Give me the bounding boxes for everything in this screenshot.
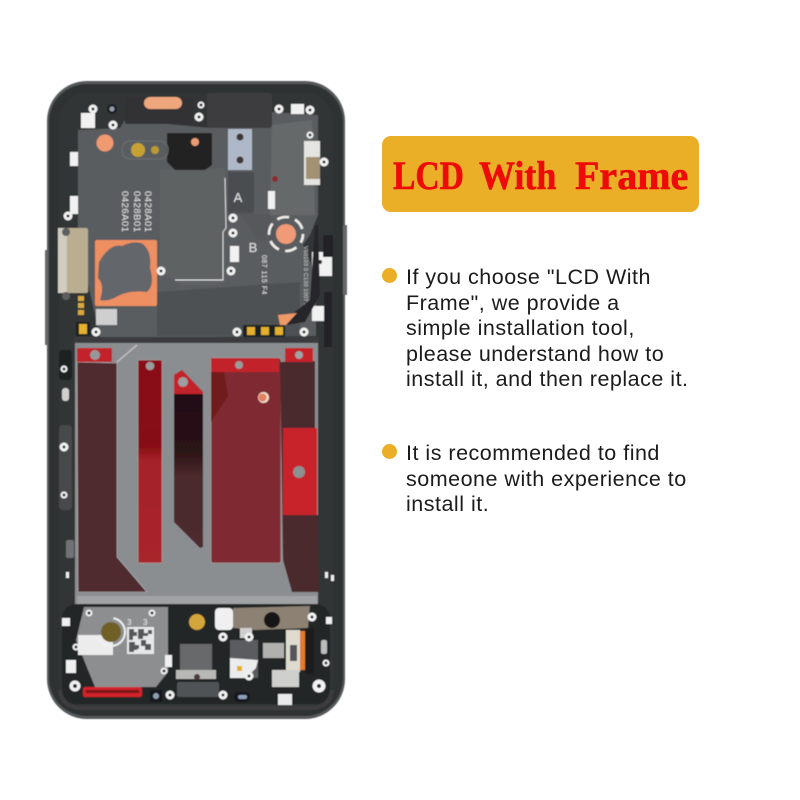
bottom black area [62,604,330,704]
title badge: Frame [575,153,688,198]
outer bezel [45,81,347,719]
text block 1: please understand how to [406,342,664,366]
bottom lower bezel [60,690,332,708]
left gold pads [78,296,84,315]
screw centres [62,104,328,696]
earpiece block [125,97,193,124]
right components [230,628,327,705]
plate letters: 0426A01 [119,191,130,233]
strip film 3 [174,370,203,548]
plate letters: B [249,240,257,255]
text block 1: simple installation tool, [406,316,635,340]
text block 2: It is recommended to find [406,441,660,465]
text block 1 [406,265,689,391]
right red film [280,348,319,592]
left gold bracket [58,228,88,300]
text block 2: install it. [406,492,489,516]
strip film 2 [138,360,162,563]
plate letters: 087 115 F4 [260,255,267,295]
QR code [127,627,154,654]
text block 1: install it, and then replace it. [406,367,689,391]
right gold connector [304,141,320,185]
red speaker [83,687,142,697]
mid plate [74,337,319,605]
plate letters: 0428A01 [142,191,153,233]
bullet 2 [382,444,397,459]
plate letters: V60103 0 C130 1007 2-08 [302,246,308,315]
copper contact [258,392,269,403]
earpiece mesh [144,97,182,109]
camera lens [95,616,127,648]
vertical plate seam [175,178,226,280]
top metal plate [78,112,318,338]
thermal pad [95,240,157,306]
camera plate [76,607,168,687]
centre components [150,614,250,702]
cooling vent ring [269,217,303,251]
text block 1: Frame", we provide a [406,291,620,315]
title badge: With [479,153,556,198]
label A [228,172,254,212]
text block 2 [406,441,687,516]
contact dots [96,104,199,159]
camera label [78,635,113,655]
thermal paste [98,242,152,300]
tan flex [215,606,310,638]
camera numbers: 3 [127,618,132,627]
title badge: LCD [392,153,463,198]
bullet 1 [382,268,397,283]
top right dark block [207,93,272,128]
camera numbers: 3 [143,618,148,627]
big red film [211,358,281,563]
silver bracket [228,129,252,170]
orange flex corner [278,313,297,325]
right flex strip [282,225,320,325]
plate letters: A [234,190,243,205]
plate letters: 0428B01 [131,191,142,233]
screws [60,102,329,699]
title badge [382,136,699,212]
text block 1: If you choose "LCD With [406,265,651,289]
left red film [77,348,147,592]
centre black block [167,133,212,170]
plate letters [119,190,308,315]
white tabs [70,104,332,325]
white bottom tabs [62,572,334,673]
camera numbers [127,618,148,627]
side rail mounts [59,235,333,558]
bottom contact strip [76,322,285,337]
text block 2: someone with experience to [406,467,687,491]
